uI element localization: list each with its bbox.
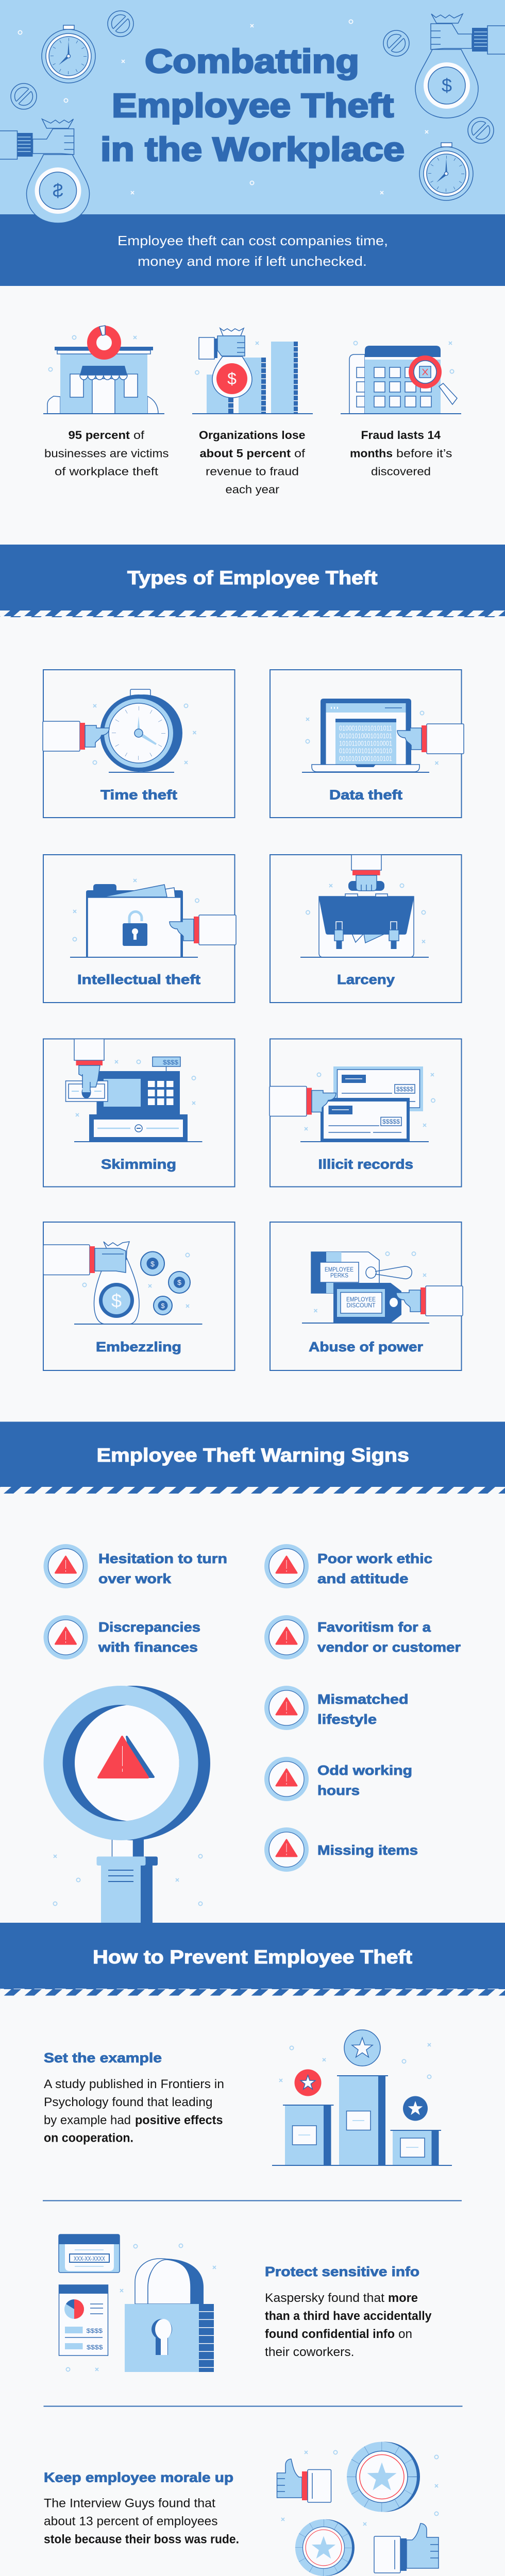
panel: data theft	[270, 670, 464, 818]
icon: cash register with hand	[66, 1039, 202, 1142]
warning: favoritism	[264, 1615, 461, 1659]
warning: odd hours	[264, 1757, 412, 1801]
coins: $	[150, 1260, 155, 1268]
icon: forged checks with hand: $$$$$	[382, 1118, 400, 1125]
heading: Employee Theft Warning Signs	[97, 1445, 409, 1466]
icon: stopwatch left	[42, 25, 95, 83]
warning: poor work ethic	[264, 1544, 432, 1588]
warning: missing items: Missing items	[317, 1842, 418, 1858]
icon: forged checks with hand	[270, 1066, 435, 1142]
icon: laptop with hand: 01000101010101011	[339, 724, 392, 732]
icon: laptop with hand	[302, 699, 464, 772]
stat text: of	[133, 429, 145, 442]
stat text: about 5 percent	[200, 447, 291, 460]
warning: discrepancies: Discrepancies	[98, 1619, 200, 1635]
icon: money bag and bars	[192, 328, 313, 414]
title	[100, 42, 405, 168]
icon: money bag left	[0, 119, 90, 223]
icon: padlock and documents: XXX-XX-XXXX	[74, 2255, 105, 2262]
warning: odd hours: hours	[317, 1783, 360, 1798]
body text: stole because their boss was rude.	[44, 2533, 239, 2546]
stat text: 95 percent	[68, 429, 130, 442]
stat text	[199, 429, 306, 496]
subtitle text: Employee theft can cost companies time,	[117, 233, 388, 248]
icon: employee tags with hand: DISCOUNT	[346, 1301, 376, 1309]
icon: forged checks with hand: $$$$$	[396, 1086, 413, 1093]
icon: stopwatch right	[419, 143, 473, 200]
icon: money bag and coins	[43, 1242, 202, 1324]
label: Embezzling	[96, 1339, 181, 1354]
label: Abuse of power	[309, 1339, 423, 1354]
icon: padlock and documents	[59, 2234, 216, 2372]
icon: big magnifying glass	[43, 1686, 210, 1923]
body text	[265, 2291, 432, 2359]
body text: their coworkers.	[265, 2345, 355, 2359]
section header: prevent	[0, 1923, 505, 1996]
icon: storefront	[43, 326, 164, 414]
label: Larceny	[337, 972, 395, 987]
body text	[44, 2077, 224, 2145]
warning: lifestyle: lifestyle	[317, 1711, 377, 1727]
body text	[44, 2497, 239, 2546]
stat: 95 percent	[43, 326, 169, 478]
warning: missing items	[264, 1827, 418, 1872]
label: Intellectual theft	[77, 972, 200, 987]
icon: money bag and bars: $	[227, 369, 237, 388]
stat: 14 months	[341, 341, 461, 478]
body text: The Interview Guys found that	[44, 2497, 215, 2510]
stat text: revenue to fraud	[206, 465, 299, 478]
body text: about 13 percent of employees	[44, 2514, 217, 2529]
decorative coins	[11, 11, 494, 194]
title: Employee Theft	[112, 87, 394, 124]
warning: lifestyle	[264, 1686, 408, 1730]
warning: hesitation: over work	[98, 1571, 172, 1586]
warning: odd hours: Odd working	[317, 1762, 412, 1778]
icon: laptop with hand: 00101010001010101	[339, 754, 392, 762]
icon: money bag and coins: $	[111, 1290, 122, 1311]
icon: padlock and documents: $$$$	[87, 2344, 103, 2351]
icon: badges and thumbs up	[277, 2442, 439, 2576]
label: Illicit records	[318, 1156, 413, 1172]
heading: Protect sensitive info	[265, 2264, 419, 2279]
panel: illicit records	[270, 1039, 462, 1187]
tip: protect sensitive info	[59, 2234, 432, 2372]
label: Time theft	[100, 787, 177, 803]
warning: hesitation	[43, 1544, 227, 1588]
stat text: of	[294, 447, 306, 460]
title: Combatting	[145, 42, 359, 80]
section header: types	[0, 545, 505, 617]
body text: found confidential info	[265, 2327, 395, 2341]
heading: Keep employee morale up	[44, 2470, 233, 2485]
icon: briefcase with hand	[300, 855, 429, 957]
body text: on cooperation.	[44, 2131, 133, 2145]
panel: skimming	[43, 1039, 235, 1187]
label: Data theft	[329, 787, 402, 803]
subtitle text: money and more if left unchecked.	[138, 253, 367, 269]
subtitle band	[0, 214, 505, 286]
stat text: Organizations lose	[199, 429, 305, 442]
heading: How to Prevent Employee Theft	[93, 1946, 412, 1968]
body text: on	[398, 2327, 412, 2341]
coins	[141, 1252, 190, 1315]
icon: cash register with hand: $$$$	[163, 1059, 178, 1066]
tip: keep morale up	[44, 2442, 439, 2576]
warning: favoritism: Favoritism for a	[317, 1619, 431, 1635]
icon: laptop with hand: 10101100101010001	[339, 739, 392, 747]
heading: Set the example	[44, 2050, 162, 2065]
stat text: Fraud lasts 14	[361, 429, 441, 442]
body text: more	[388, 2291, 418, 2305]
body text: Psychology found that leading	[44, 2095, 212, 2109]
icon: employee tags with hand: EMPLOYEE	[325, 1266, 354, 1273]
stat text: months	[350, 447, 393, 460]
coins: $	[161, 1302, 165, 1310]
panel: time theft	[43, 670, 235, 818]
icon: laptop with hand: 01010101011001010	[339, 747, 392, 755]
panel: abuse of power	[270, 1222, 463, 1370]
icon: stopwatch with hand	[43, 689, 196, 772]
warning: lifestyle: Mismatched	[317, 1691, 408, 1707]
icon: employee tags with hand	[302, 1252, 463, 1323]
title: in the Workplace	[100, 130, 405, 168]
body text: by example had	[44, 2113, 131, 2127]
icon: money bag right	[415, 14, 505, 118]
stat text: discovered	[371, 465, 431, 478]
warning: poor work ethic: and attitude	[317, 1571, 408, 1586]
panel: intellectual theft	[43, 855, 236, 1003]
tip: set the example	[44, 2030, 452, 2165]
section header: warning signs	[0, 1422, 505, 1494]
icon: laptop with hand: 00101010001010101	[339, 732, 392, 740]
panel: larceny	[270, 855, 462, 1003]
stat text	[350, 429, 452, 478]
coins: $	[177, 1278, 181, 1286]
warning: poor work ethic: Poor work ethic	[317, 1551, 432, 1566]
icon: padlock and documents: $$$$	[87, 2327, 103, 2334]
warning: discrepancies	[43, 1615, 200, 1659]
stat: 5 percent	[192, 328, 313, 496]
icon: employee tags with hand: EMPLOYEE	[346, 1296, 376, 1303]
stat text: before it’s	[396, 447, 452, 460]
stat text: of workplace theft	[55, 465, 158, 478]
stat text: each year	[226, 483, 279, 496]
header panel	[0, 0, 505, 286]
icon: calendar and magnifier	[341, 341, 461, 414]
body text: positive effects	[135, 2113, 223, 2127]
icon: employee tags with hand: PERKS	[330, 1272, 348, 1279]
body text: than a third have accidentally	[265, 2309, 432, 2323]
subtitle text	[117, 233, 388, 269]
stat text: businesses are victims	[44, 447, 169, 460]
panel: embezzling	[43, 1222, 235, 1370]
body text: A study published in Frontiers in	[44, 2077, 224, 2091]
icon: podium with medals	[272, 2030, 452, 2165]
warning: favoritism: vendor or customer	[317, 1639, 461, 1655]
warning: hesitation: Hesitation to turn	[98, 1551, 227, 1566]
label: Skimming	[101, 1156, 176, 1172]
heading: Types of Employee Theft	[127, 567, 377, 588]
body text: Kaspersky found that	[265, 2291, 384, 2305]
icon: locked folder with hand	[70, 879, 236, 957]
stat text	[44, 429, 169, 478]
warning: discrepancies: with finances	[98, 1639, 198, 1655]
